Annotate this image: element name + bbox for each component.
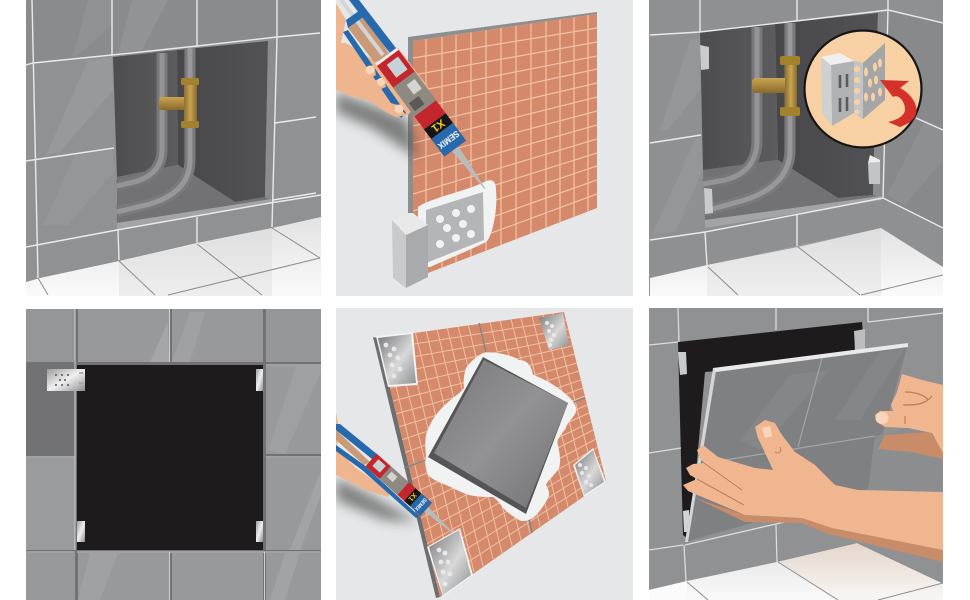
hand — [336, 412, 390, 497]
surrounding tiles — [26, 309, 321, 600]
floor tiles — [650, 228, 943, 296]
brass T fitting — [159, 78, 199, 128]
wall clips — [678, 329, 865, 532]
hand shadow — [336, 478, 418, 522]
wall clips — [700, 45, 880, 214]
sealant cartridge: X1 — [429, 117, 447, 134]
tile back with grid — [408, 12, 597, 273]
grout lines — [649, 308, 943, 581]
right hand — [875, 374, 943, 459]
brass T fitting — [752, 56, 800, 116]
niche interior — [113, 40, 277, 230]
floor tiles — [649, 543, 943, 600]
bracket box — [392, 213, 428, 288]
callout circle with bracket detail — [804, 30, 922, 148]
panel 2: applying sealant to bracket on tile back — [336, 0, 633, 300]
floor tiles — [26, 217, 321, 296]
left hand and arm — [683, 420, 943, 562]
sealant cartridge — [365, 454, 453, 533]
caulking gun frame — [341, 0, 406, 118]
fingers wrapped over cartridge — [366, 65, 406, 117]
sealant cartridge: SEMIX — [436, 129, 461, 151]
panel 6: hands fitting the tile panel into place — [649, 308, 943, 600]
tile back panel with grid — [373, 312, 606, 598]
caulking gun frame — [336, 424, 419, 518]
black board behind tile — [678, 322, 865, 540]
sealant blob — [425, 352, 576, 521]
tile grout lines — [650, 0, 943, 265]
tile panel — [685, 343, 943, 542]
edge clips — [77, 369, 263, 542]
hand — [336, 3, 429, 117]
sealant blob — [418, 180, 496, 267]
sealant cartridge: X1 — [407, 491, 418, 502]
niche interior — [700, 12, 888, 228]
black board — [77, 365, 263, 550]
panel 1: open wall niche with pipes — [26, 0, 321, 296]
pipes — [703, 23, 790, 211]
corner brackets — [376, 313, 606, 597]
panel 5: applying sealant to back of tile panel — [336, 308, 633, 600]
red arrow — [880, 80, 916, 127]
hand shadow — [336, 92, 418, 158]
panel 3: niche with brackets and bracket detail callout — [649, 0, 943, 296]
bracket plate — [426, 192, 484, 263]
long corner bracket — [47, 369, 85, 391]
grey panel — [428, 357, 568, 514]
tile grout lines — [26, 0, 321, 278]
sealant cartridge: SEMIX — [413, 496, 428, 512]
sealant cartridge — [375, 48, 486, 189]
panel 4: black board mounted in wall opening — [26, 309, 321, 600]
pipes — [117, 48, 190, 212]
